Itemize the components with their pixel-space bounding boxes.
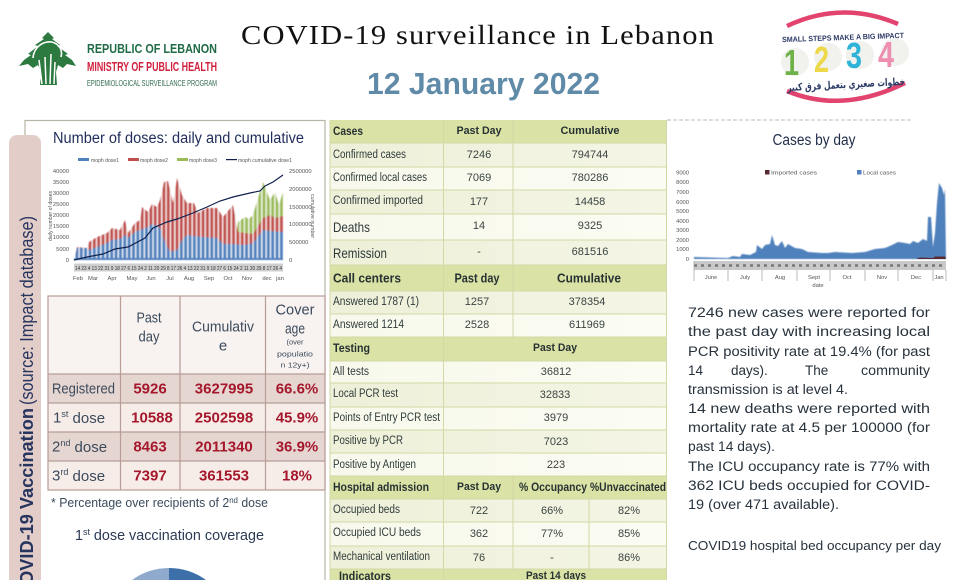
date band: Feb — [73, 276, 83, 282]
table header: day — [138, 328, 160, 346]
sidebar: vaccination label — [9, 135, 41, 580]
date band: Dec — [911, 275, 921, 281]
row: second dose: 2 — [52, 438, 60, 456]
table header: (over — [286, 338, 304, 346]
y axis labels: 4000 — [676, 219, 689, 225]
section: call centers: 1257 — [465, 296, 489, 308]
date band: Aug — [184, 276, 194, 282]
row: first dose: st — [61, 409, 69, 419]
row: second dose: 2011340 — [195, 438, 253, 456]
local cases bars — [694, 183, 946, 259]
section: cases: 7069 — [467, 172, 491, 184]
section: hospital admission: 82% — [618, 505, 640, 517]
title: COVID-19 surveillance in Lebanon — [241, 20, 715, 50]
section: hospital admission: Hospital admission — [333, 480, 429, 494]
section: testing — [330, 337, 666, 476]
section: testing: All tests — [333, 366, 369, 378]
section: testing: Testing — [333, 341, 370, 355]
stacked bars — [74, 170, 283, 260]
icon: numbered steps: 3 — [846, 35, 862, 76]
date heading: 12 January 2022 — [367, 66, 600, 101]
chart: daily and cumulative doses — [48, 158, 315, 282]
section: cases: Deaths — [333, 219, 370, 235]
section: hospital admission: 77% — [541, 528, 563, 540]
icon: numbered steps: 2 — [814, 39, 829, 80]
section: call centers: Call centers — [333, 270, 401, 286]
text block: daily summary: PCR positivity rate at 19.4% (for past — [688, 344, 930, 359]
arabic slogan: خطوات صغيري بتعمل فرق كبير — [786, 76, 905, 94]
axes labels: 500000 — [289, 240, 308, 246]
date band: Jun — [146, 276, 156, 282]
footnote: nd — [229, 496, 238, 505]
row: first dose: 1 — [53, 410, 61, 426]
logo text: EPIDEMIOLOGICAL SURVEILLANCE PROGRAM — [87, 78, 217, 88]
section: cases: 9325 — [578, 220, 602, 232]
axes labels: 0 — [289, 258, 292, 264]
legend: moph dose3 — [189, 158, 217, 164]
axes labels: 30000 — [53, 191, 69, 197]
y axis labels — [676, 170, 689, 263]
date band: Nov — [242, 276, 252, 282]
section: call centers: 378354 — [569, 296, 605, 308]
table header — [136, 302, 315, 370]
legend: Local cases — [863, 170, 896, 176]
section: hospital admission: Occupied ICU beds — [333, 527, 421, 539]
section: hospital admission: % Occupancy — [519, 480, 587, 494]
date band: dec — [262, 276, 272, 282]
icon: cedar tree — [19, 32, 76, 85]
row: second dose — [52, 440, 318, 452]
y axis labels: 2000 — [676, 238, 689, 244]
table: vaccination doses — [48, 296, 325, 490]
section: hospital admission: %Unvaccinated — [590, 480, 666, 494]
date band: Mar — [88, 276, 98, 282]
section: cases: 7246 — [467, 149, 491, 161]
section: cases: Confirmed imported — [333, 195, 423, 207]
y axis labels: 8000 — [676, 180, 689, 186]
section: testing: Positive by Antigen — [333, 459, 416, 471]
panel: vaccination — [9, 120, 325, 580]
section: cases: 14 — [473, 220, 485, 232]
date band: Sept — [808, 275, 820, 281]
date band: July — [740, 275, 750, 281]
cumulative line — [74, 175, 283, 260]
section: cases: 780286 — [572, 172, 608, 184]
axes labels: 10000 — [53, 235, 69, 241]
row: registered — [53, 382, 318, 396]
row: third dose: 361553 — [199, 468, 249, 484]
text block: daily summary: The — [805, 363, 828, 378]
text block: daily summary: mortality rate at 4.5 per 100000 (for — [688, 420, 931, 435]
date band: June — [705, 275, 717, 281]
section: hospital admission: 362 — [470, 528, 488, 540]
legend: moph cumulative dose1 — [238, 158, 292, 164]
footnote: * Percentage over recipients of 2 — [51, 496, 232, 510]
row: third dose — [52, 468, 312, 481]
axes labels: cumulative number — [309, 194, 315, 238]
section: call centers: 611969 — [569, 319, 605, 331]
axes labels: 40000 — [53, 169, 69, 175]
row: first dose — [54, 411, 318, 423]
date band: Jan — [934, 275, 944, 281]
axes labels: 25000 — [53, 202, 69, 208]
heading: first dose coverage: 1 — [75, 528, 83, 544]
section: cases: 681516 — [572, 246, 608, 258]
section: cases: Past Day — [456, 125, 502, 137]
y axis labels: 9000 — [676, 170, 689, 176]
text block: daily summary: 14 new deaths were reported with — [688, 401, 930, 416]
date band: Aug — [775, 275, 785, 281]
date band: Apr — [107, 276, 117, 282]
section: hospital admission: Occupied beds — [333, 504, 400, 516]
section: testing: Local PCR test — [333, 388, 399, 400]
row: third dose: rd — [60, 467, 68, 477]
section: testing: 36812 — [541, 366, 571, 378]
table header: age — [285, 320, 305, 338]
table header: Cumulativ — [192, 318, 254, 336]
logo text: REPUBLIC OF LEBANON — [87, 42, 217, 56]
heading: first dose coverage: dose vaccination coverage — [90, 528, 264, 544]
heading: hospital bed occupancy: COVID19 hospital bed occupancy per day — [688, 538, 942, 553]
section: cases: Confirmed cases — [333, 149, 406, 161]
footnote: dose — [238, 496, 268, 510]
section: hospital admission — [330, 476, 666, 569]
date band: 14 23 4 13 22 31 9 18 27 6 15 24 2 11 20 29 8 17 26 4 13 22 31 9 18 27 6 15 24 2 11 20 29 8 17 26 4 — [75, 266, 283, 272]
date band: jan — [275, 276, 284, 282]
slogan: SMALL STEPS MAKE A BIG IMPACT — [782, 31, 905, 44]
axes labels: 1000000 — [289, 222, 312, 228]
row: third dose: 7397 — [133, 468, 167, 484]
y axis labels: 0 — [686, 257, 689, 263]
section: hospital admission: - — [550, 552, 554, 564]
text block: daily summary: days). — [731, 363, 768, 378]
section: call centers: 2528 — [465, 319, 489, 331]
axes labels — [48, 169, 315, 264]
axes labels: 20000 — [53, 213, 69, 219]
row: registered: 66.6% — [276, 380, 318, 398]
icon: numbered steps: 1 — [784, 42, 799, 83]
date band: Nov — [877, 275, 887, 281]
section: testing: 32833 — [540, 389, 570, 401]
date band: Jul — [166, 276, 174, 282]
section: cases: 14458 — [575, 196, 605, 208]
section: hospital admission: 85% — [618, 528, 640, 540]
table header: e — [219, 338, 227, 354]
row: second dose: 8463 — [133, 438, 167, 456]
text block: daily summary: past 14 days). — [688, 439, 775, 454]
row: first dose: 45.9% — [276, 410, 318, 426]
section: cases: Confirmed local cases — [333, 172, 427, 184]
text block: daily summary: 14 — [688, 363, 704, 378]
section: hospital admission: Mechanical ventilation — [333, 551, 430, 563]
logo: Ministry of Public Health — [19, 32, 217, 88]
section: testing: Positive by PCR — [333, 435, 403, 447]
section: testing: 223 — [547, 459, 565, 471]
section: cases: Cases — [333, 124, 363, 138]
legend: moph dose2 — [140, 158, 168, 164]
date band: May — [127, 276, 138, 282]
table header: Past — [136, 310, 162, 326]
section: call centers: Cumulative — [557, 270, 621, 286]
axes labels: 0 — [66, 258, 69, 264]
table: surveillance — [330, 120, 666, 580]
axes labels: daily number of doses — [48, 191, 54, 241]
row: first dose: dose — [68, 410, 105, 426]
sidebar: vaccination label: (source: Impact database) — [16, 216, 37, 405]
section: call centers — [330, 265, 666, 337]
date band: Oct — [223, 276, 233, 282]
date band: Sep — [204, 276, 214, 282]
icon: top and bottom pink arcs — [787, 12, 905, 101]
axes labels: 5000 — [56, 247, 69, 253]
section: cases: Cumulative — [560, 125, 620, 137]
section: testing: Past Day — [533, 342, 578, 354]
heading: number of doses: Number of doses: daily and cumulative — [53, 130, 304, 147]
section: testing: 3979 — [544, 412, 568, 424]
section: call centers: Answered 1787 (1) — [333, 296, 419, 308]
logo: small steps make a big impact — [781, 12, 909, 101]
section: hospital admission: 76 — [473, 552, 485, 564]
section: call centers: Answered 1214 — [333, 319, 405, 331]
table header: populatio — [277, 350, 313, 358]
y axis labels: 6000 — [676, 200, 689, 206]
row: second dose: nd — [60, 438, 70, 448]
row: registered: 3627995 — [195, 380, 253, 398]
axes labels: 1500000 — [289, 205, 312, 211]
text block: daily summary: 7246 new cases were reported for — [688, 305, 931, 320]
row: third dose: dose — [68, 468, 105, 484]
section: cases: - — [477, 246, 481, 258]
row: registered: Registered — [52, 380, 115, 398]
axes labels: 2000000 — [289, 187, 312, 193]
axes labels: 35000 — [53, 180, 69, 186]
text block: daily summary — [688, 305, 931, 512]
heading: cases by day: Cases by day — [772, 132, 856, 149]
legend — [765, 170, 896, 176]
section: testing: 7023 — [544, 436, 568, 448]
axes labels: 15000 — [53, 224, 69, 230]
row: first dose: 10588 — [131, 410, 173, 426]
logo text — [87, 42, 217, 88]
section: indicators — [330, 569, 666, 580]
y axis labels: 7000 — [676, 190, 689, 196]
row: second dose: 36.9% — [276, 438, 318, 456]
text block: daily summary: 19 (over 471 available). — [688, 497, 839, 512]
row: registered: 5926 — [133, 380, 167, 398]
axes labels: 2500000 — [289, 169, 312, 175]
section: cases — [330, 120, 666, 265]
section: hospital admission: 66% — [541, 505, 563, 517]
legend: moph dose1 — [91, 158, 119, 164]
icon: numbered steps: 4 — [878, 34, 894, 75]
row: second dose: dose — [70, 438, 107, 456]
section: testing: Points of Entry PCR test — [333, 412, 441, 424]
text block: daily summary: transmission is at level 4. — [688, 382, 848, 397]
date band: date — [812, 283, 824, 289]
section: cases: 177 — [470, 196, 488, 208]
section: hospital admission: 722 — [470, 505, 488, 517]
section: cases: Remission — [333, 245, 387, 261]
y axis labels: 5000 — [676, 209, 689, 215]
section: cases: 794744 — [572, 149, 608, 161]
legend: Imported cases — [771, 170, 817, 176]
text block: daily summary: the past day with increasing local — [688, 324, 930, 339]
y axis labels: 1000 — [676, 247, 689, 253]
icon: numbered steps — [781, 34, 909, 83]
text block: daily summary: The ICU occupancy rate is 77% with — [688, 459, 930, 474]
row: first dose: 2502598 — [195, 410, 253, 426]
date band: Oct — [842, 275, 852, 281]
heading: first dose coverage: st — [83, 527, 90, 537]
section: call centers: Past day — [454, 270, 500, 286]
text block: daily summary: 362 ICU beds occupied for COVID- — [688, 478, 930, 493]
date band — [73, 264, 284, 282]
imported cases bars — [916, 256, 946, 259]
section: hospital admission: 86% — [618, 552, 640, 564]
panel frame — [25, 120, 325, 580]
text block: daily summary: community — [861, 363, 930, 378]
legend — [78, 158, 292, 163]
pie chart: first dose coverage — [132, 568, 206, 580]
date band — [694, 261, 946, 289]
row: third dose: 18% — [282, 468, 312, 484]
chart: cases by day — [676, 170, 946, 289]
section: hospital admission: Past Day — [457, 481, 502, 493]
y axis labels: 3000 — [676, 228, 689, 234]
table header: n 12y+) — [280, 360, 310, 370]
row: third dose: 3 — [52, 468, 60, 484]
table header: Cover — [276, 302, 315, 318]
logo text: MINISTRY OF PUBLIC HEALTH — [87, 59, 217, 74]
